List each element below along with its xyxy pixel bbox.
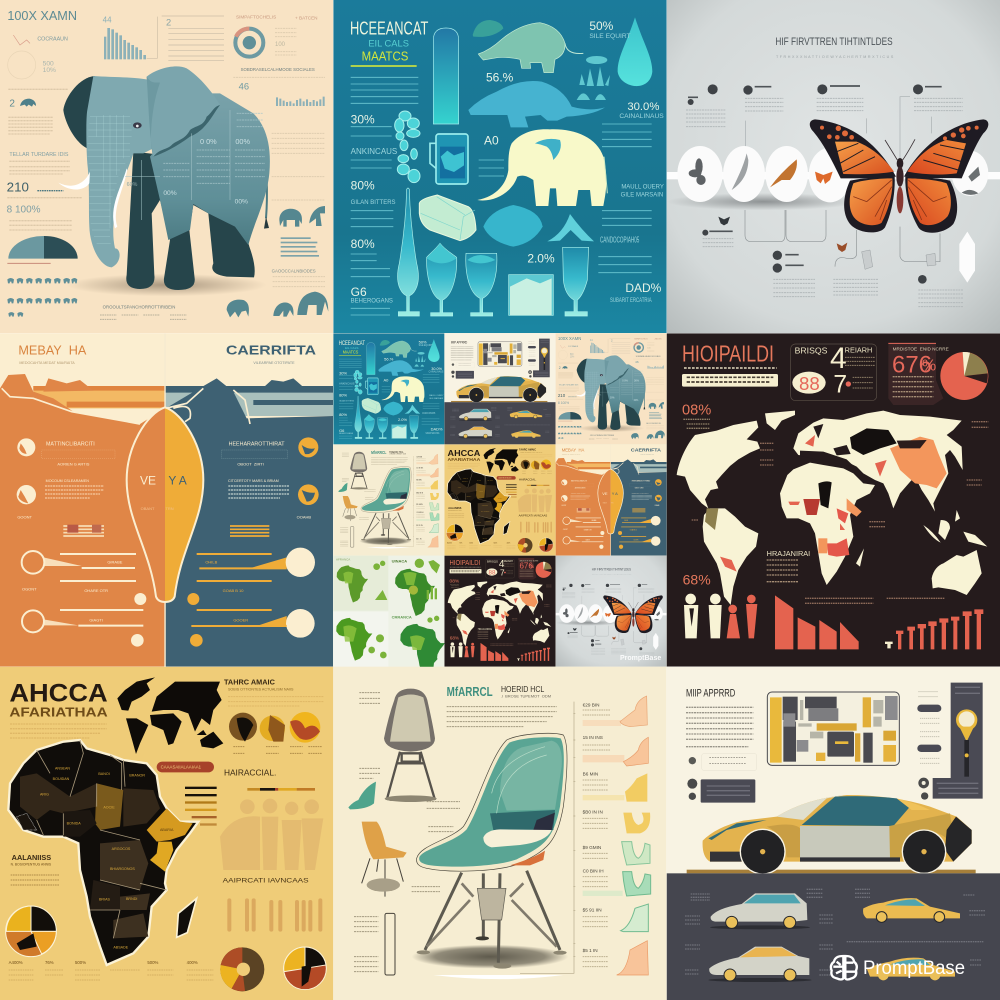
map highlights [705, 424, 947, 572]
caption: bottom centre [100, 304, 187, 319]
illustration: elephant: 00% [163, 190, 177, 197]
icon: tail elephant [604, 157, 607, 193]
panel: elephant infographic [0, 0, 333, 333]
map: africa: BHIARGONOS [110, 867, 135, 871]
map: top right [395, 569, 435, 616]
text lines: left column: BEHEROGANS [351, 299, 393, 305]
text block: left column notes: 8 100% [7, 205, 41, 216]
side: blue ground [166, 378, 333, 667]
icon: small dark butterfly [718, 217, 730, 225]
heading: aalaniss: AALANIISS [12, 853, 51, 862]
tile: green africa maps: UINACA [392, 559, 407, 564]
schematic: engine [767, 692, 899, 765]
text block: top centre [147, 16, 224, 61]
stats box [791, 342, 877, 401]
stat blocks: right: A0 [484, 134, 499, 148]
text lines: left column: G6 [351, 285, 367, 299]
stats box: BRISQS [795, 345, 828, 355]
stage circles [677, 146, 988, 202]
timeline rail [520, 702, 575, 973]
heading: world [682, 340, 778, 387]
illustration: armadillo animal [468, 81, 605, 127]
variants: peach and yellow chairs [583, 696, 650, 833]
chart: falling bars [775, 595, 859, 649]
heading: butterfly [775, 36, 894, 59]
icon: left flag [63, 525, 104, 536]
right funnels: OHILB [205, 560, 218, 565]
variants: green and peach chairs [583, 842, 651, 975]
legend: bars right [272, 237, 319, 274]
stat blocks: right: CAINALINAUS [619, 113, 664, 120]
panel: chair infographic [333, 667, 667, 1000]
illustration: elephant: 00% [235, 198, 248, 205]
watermark: brain icon [831, 956, 857, 980]
blueprint: mini column [385, 913, 395, 975]
text block: left column notes: 500 [43, 60, 54, 67]
labels: right column: B6 MIN [583, 772, 598, 777]
left funnels [22, 551, 146, 647]
world map: black [117, 677, 223, 754]
illustration: monarch butterfly [810, 119, 988, 233]
stat labels: HRAJANIRAI [767, 549, 810, 558]
heading: blue panel [350, 18, 428, 66]
label tag [959, 232, 975, 283]
stats box: 4 [830, 342, 847, 375]
illustration: elephant [58, 66, 270, 290]
text block: top centre: 2 [166, 17, 171, 27]
stats row: 76% [45, 960, 54, 965]
map: africa [8, 740, 198, 965]
map: africa: BRNDI [126, 897, 137, 901]
icon: pilsner glass [563, 247, 589, 316]
icons: bottom elephants [227, 292, 328, 317]
headings: CAERRIFTA [226, 344, 316, 358]
pie chart: right [284, 947, 326, 990]
dark lower section [667, 873, 1000, 1000]
left notes: globes and text [17, 438, 115, 520]
stats row: 500% [75, 960, 86, 965]
heading: chair [447, 685, 551, 699]
icon: ice block [419, 195, 476, 241]
heading: africa [9, 680, 108, 738]
text block: left column notes: 10% [43, 67, 56, 74]
right notes: globes and text: OOAHB [297, 515, 311, 520]
stats box: 88 [799, 373, 820, 394]
map: africa: ANSEAN [55, 766, 70, 770]
segmented bar [247, 788, 315, 791]
right notes: globes and text: OBOOT ZIRTI [237, 462, 264, 467]
stat blocks: right: 50% [589, 19, 614, 33]
heading: right top: TAHRC AMAIC [224, 678, 276, 687]
mini details [343, 559, 440, 658]
stats row: 400% [187, 960, 198, 965]
landscape: right sea [166, 378, 333, 416]
left dark note [687, 753, 757, 803]
central leaf shape: Y A [168, 474, 187, 488]
side pills [917, 692, 941, 763]
text lines: left column: ANKINCAUS [351, 147, 397, 156]
stat blocks: right: MAULL OUERY [621, 185, 664, 191]
shadow: circles [667, 193, 860, 210]
text lines: left column [351, 77, 418, 315]
bar chart: lines [185, 787, 217, 826]
watermark: mini: PromptBase [620, 655, 661, 662]
right notes: globes and text: HEEHARAROTTHIRAT [229, 441, 285, 447]
icon: ice mountain [547, 214, 594, 241]
right funnels: GOOER [233, 617, 248, 622]
illustration: tapir animal [473, 20, 583, 73]
icon: right flag [230, 526, 269, 536]
caption: bottom centre: OROOULTSPANCHORROTTIRIBEIN [103, 304, 175, 309]
coast lines [2, 388, 250, 424]
right funnels: GOAB B 10 [223, 588, 244, 593]
pie chart: left [6, 906, 56, 957]
car: yellow coupe top [863, 898, 960, 922]
left funnels: OHARE OTR [84, 588, 108, 593]
stat blocks: right: 56.% [486, 70, 514, 84]
stat blocks: right: SUBARIT ERCATRIA [610, 297, 652, 304]
tile: green africa maps [333, 556, 445, 677]
headings: MEDOCAHTA MEDAT MIA/RAITA [19, 361, 75, 365]
chair: yellow [362, 822, 407, 897]
icons: small device [862, 250, 936, 269]
text block: intro [686, 707, 753, 747]
headings: VILEARPAE OTOTIPATE [253, 361, 295, 365]
illustration: elephant: 0 0% [200, 137, 217, 146]
icon: chrysalis [732, 153, 748, 190]
callout: percent [888, 343, 949, 405]
labels: right column: $9 GMIN [583, 845, 601, 850]
chair: main teal [412, 733, 568, 979]
left notes: globes and text: AORIEN G ARTIS [57, 462, 90, 467]
stat blocks: right: CANDOCOPIAH05 [600, 236, 640, 245]
text block: centre [354, 693, 557, 972]
panel: africa infographic [0, 667, 333, 1000]
stat labels: 68% [683, 571, 711, 587]
timeline band [667, 172, 1000, 179]
labels: right column: C0 BIN IH [583, 868, 604, 873]
stats box: 7 [833, 372, 847, 399]
silhouettes: large [220, 799, 323, 870]
text block: top right stats: + BATCEN [295, 15, 318, 20]
left notes: globes and text: MOCOUM CSLEARAMEN [46, 479, 89, 483]
heading: aalaniss [11, 853, 52, 866]
panel: orange and blue comparison [0, 333, 333, 667]
text block: left column notes [7, 35, 82, 230]
heading: haracial: HAIRACCIAL. [224, 767, 276, 777]
left notes: globes and text: MATTINCLIBARCITI [46, 441, 95, 447]
icon: ground shadow [67, 274, 267, 296]
panel: car infographic [667, 667, 1000, 1000]
donut chart [235, 29, 263, 57]
legend: bars right: GAOOCCALNBIODES [272, 269, 316, 274]
heading: world: HIOIPAILDI [682, 340, 774, 366]
map: africa: ABARIA [160, 828, 174, 832]
icon: small butterfly lower [837, 243, 847, 252]
icon: water drop [618, 17, 652, 86]
connector lines [745, 210, 940, 267]
map: africa: ARGOCOS [112, 847, 131, 851]
icon: small butterfly [815, 172, 833, 184]
map: bottom left [336, 618, 372, 661]
text block: top right stats: SOBDRASELCALHMOOE SOCIALES [241, 67, 315, 72]
silhouettes: small [227, 898, 322, 932]
text block: top right stats: 100 [275, 42, 286, 48]
stat blocks: right [484, 19, 664, 304]
hill left [43, 378, 93, 392]
icon: moth [689, 158, 706, 185]
heading: lower right: AAIPRCATI IAVNCAAS [223, 878, 309, 885]
text block: left column notes: COCRAAUN [37, 37, 68, 43]
panel: world map infographic [667, 333, 1000, 667]
label pill [157, 762, 214, 772]
stat blocks: right: GILE MARSAIN [621, 193, 663, 199]
heading: africa: AHCCA [9, 680, 108, 708]
bar chart: small blue [276, 97, 325, 106]
stat labels: 08% [682, 402, 711, 418]
callout: percent: % [922, 358, 936, 375]
tile: ice [333, 333, 444, 444]
text lines: right column [479, 124, 652, 273]
tile: orange comparison [556, 444, 667, 556]
heading: right top: SOBIS OTTIONTES ACTUALISM NAIIS [228, 688, 294, 692]
headings: MEBAY HA [18, 344, 87, 358]
illustration: cream elephant [477, 129, 606, 206]
bar chart: decline [103, 16, 146, 59]
heading: butterfly: T F R H X X X N A T T I O E W Y A C H E R T M R X T I C U S [776, 55, 894, 59]
tile: butterfly [556, 556, 667, 667]
heading: chair: MfARRCL [447, 685, 493, 699]
world map [677, 411, 987, 605]
labels: right column: $B0 IN IN [583, 810, 603, 815]
text block: left column notes: 2 [9, 99, 15, 110]
heading: aalaniss: N. BOSIOPENTIUG ANNIS [11, 862, 52, 866]
stats box: REIARH [845, 346, 872, 355]
landscape: left sea [33, 386, 165, 408]
icon: ice pile [483, 205, 543, 247]
donut chart [220, 947, 264, 991]
icon: tube [433, 28, 459, 124]
panel: ice blue infographic [333, 0, 667, 333]
labels: right column: €29 BIN [583, 702, 599, 707]
icon: mug [430, 134, 468, 184]
heading: blue panel: MAATCS [362, 49, 408, 64]
text block: top right stats [233, 15, 325, 287]
stats row: 500% [147, 960, 159, 965]
pin gauge panel [933, 683, 983, 799]
ground line [687, 870, 976, 873]
map: top left [337, 565, 368, 603]
callout: percent: 676 [892, 352, 932, 379]
icon: moth orange [770, 159, 797, 187]
text lines: left column: 30% [351, 112, 375, 126]
stat labels [682, 402, 988, 603]
text block: left column notes: 210 [7, 180, 29, 195]
illustration: elephant: 00% [235, 137, 250, 146]
tile: world map [444, 556, 556, 667]
right notes: globes and text [222, 437, 319, 520]
heading: car: MIIP APPRRD [686, 688, 735, 700]
text lines: left column: 80% [351, 178, 375, 192]
car: grey hatchback [710, 893, 810, 929]
stat blocks: right: 30.0% [627, 101, 659, 113]
labels: right column: 15 IN INS [583, 735, 603, 740]
pictogram rows: elephants [7, 263, 77, 317]
text block: left column notes: TELLAR TURDARE IDIS [9, 152, 69, 158]
stats row [9, 960, 213, 980]
tile: elephant [556, 333, 667, 444]
map: bottom right [400, 624, 445, 677]
chart: rising pillars [885, 609, 983, 649]
map: africa: BOUIDAN [53, 777, 70, 781]
map: africa: BRANOR [129, 774, 145, 778]
central leaf shape: VE [140, 474, 156, 488]
right notes: globes and text: CITCERTOTY MARS & BRIAM [228, 479, 279, 483]
stat blocks: right: DAD% [625, 281, 662, 295]
central leaf shape [127, 407, 203, 602]
labels: right column: $5 1 IN [583, 948, 598, 953]
left funnels: OGONT [22, 586, 37, 591]
map: africa: BONIDA [67, 821, 81, 825]
text block: top right stats: SIMPAFTOCHELIS [236, 15, 276, 20]
central divider [164, 333, 166, 667]
text lines: left column: 80% [351, 237, 375, 251]
text blocks: lower notes [702, 230, 963, 307]
left funnels: GIRABE [107, 560, 123, 565]
icon: ice cluster [395, 111, 420, 183]
tile: car [444, 333, 556, 444]
chart: half dome [8, 236, 78, 259]
left notes: globes and text: GOONT [17, 515, 33, 520]
heading: butterfly: HIF FIRVTTREN TIHTINTLDES [775, 36, 893, 48]
icon: flute glass [398, 188, 419, 316]
icons: small elephants right [279, 206, 325, 227]
heading: elephant: 100X XAMN [7, 9, 77, 23]
map: africa: ABSADE [113, 945, 129, 949]
icon: seed pods [962, 167, 980, 195]
stat blocks: right: SILE EQUIRT [589, 33, 631, 40]
icon: ice box [509, 275, 553, 315]
watermark: PromptBase: PromptBase [863, 958, 965, 979]
headings [18, 344, 316, 365]
left funnels: GIAGTI [89, 617, 103, 622]
icon: sundae [427, 243, 457, 316]
car: grey sedan lower [708, 947, 812, 982]
icon: small teal seat [348, 782, 376, 809]
pictogram: people [684, 594, 757, 638]
panel: butterfly infographic [667, 0, 1000, 333]
text lines: left column: GILAN BITTERS [351, 200, 396, 206]
tile: green africa maps: AFRANCA [336, 558, 350, 562]
icon: plants [577, 56, 610, 100]
notes: dark section [685, 889, 985, 975]
text blocks: upper notes [686, 84, 963, 167]
text block: top right stats: 46 [239, 81, 249, 91]
pie chart [940, 352, 988, 400]
label pill: CAAASAIIALAAIAA1 [161, 764, 202, 769]
heading: chair: .I BROSE TUPEMOT ODM [501, 693, 551, 698]
stats row: A400% [9, 960, 23, 965]
callout: percent: MRDISTOE ENID NCRRE [893, 347, 949, 352]
labels: right column: $5 91 IIN [583, 908, 602, 913]
bar chart: decline: 44 [103, 16, 112, 25]
side: orange ground [0, 374, 165, 667]
heading: right top [224, 678, 323, 706]
icon: right dots [918, 778, 929, 800]
small captions [11, 747, 322, 885]
map: africa: BANOI [98, 772, 110, 776]
heading: africa: AFARIATHAA [9, 705, 108, 720]
illustration: elephant: 60% [127, 182, 138, 188]
icon: tumbler [466, 253, 497, 316]
illustration: main car [703, 795, 972, 875]
heading: blue panel: HCEEANCAT [350, 18, 428, 39]
map: africa: AOCIE [103, 805, 115, 809]
right funnels [187, 548, 315, 647]
heading: blue panel: EIL CALS [368, 39, 409, 49]
car: yellow coupe lower [867, 958, 955, 980]
tile: africa [444, 444, 556, 556]
map: africa: ARIG [40, 792, 49, 796]
icon: ear highlight [535, 139, 561, 160]
map: africa: BRIAS [99, 898, 111, 902]
panel: mini collage tiles [333, 333, 667, 677]
heading: chair: HOERID HCL [501, 685, 545, 694]
pie circles top [229, 712, 320, 743]
tile: green africa maps: CRRANCA [392, 614, 412, 619]
stat blocks: right: 2.0% [527, 252, 555, 266]
labels: right column [583, 702, 610, 967]
central leaf shape: OBANT TRN [141, 506, 174, 511]
tile: chair [333, 444, 444, 556]
chair: back view [384, 689, 437, 802]
